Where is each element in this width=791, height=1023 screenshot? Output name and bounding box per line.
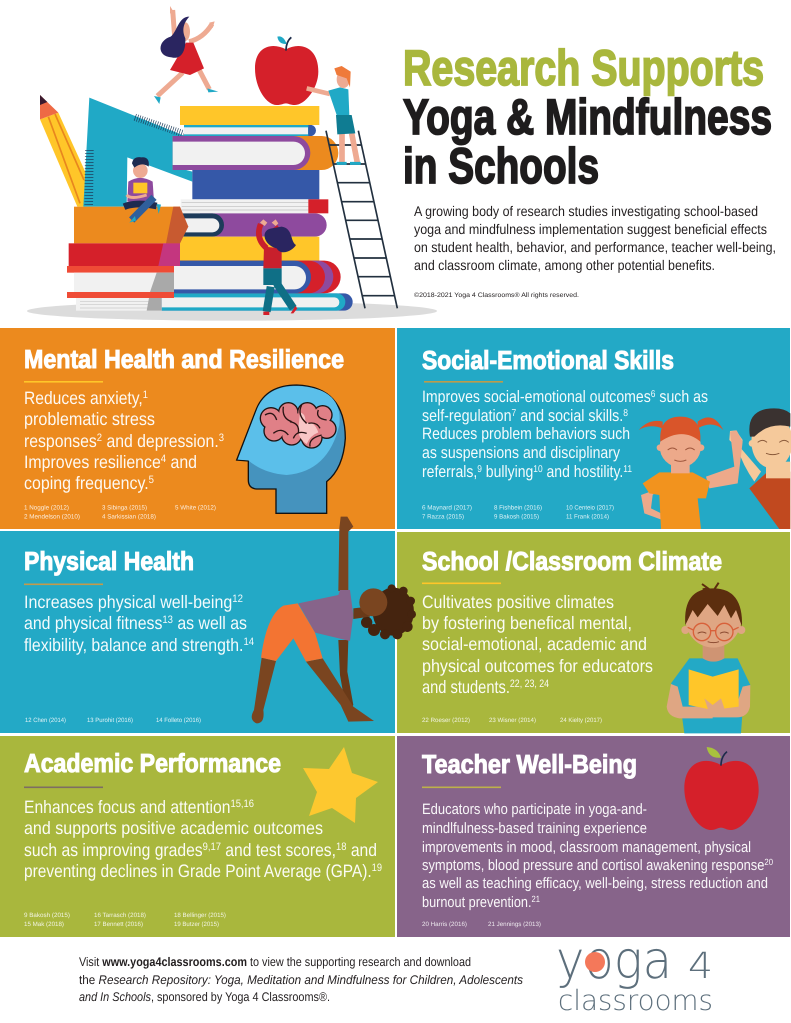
text: physical health body: [24, 592, 254, 655]
hero illustration: books, school supplies and children: [27, 6, 437, 321]
title: [403, 40, 772, 194]
footer text: [79, 955, 523, 1004]
intro paragraph: and classroom climate, among other potential benefits.: [414, 257, 715, 273]
text: social-emotional body: Reduces problem behaviors such: [422, 425, 630, 443]
logo: yoga 4 classrooms: yoga: [556, 931, 672, 991]
text: school climate body: physical outcomes for educators: [422, 656, 653, 676]
copyright: ©2018-2021 Yoga 4 Classrooms® All rights reserved.: [414, 292, 579, 299]
text: social-emotional body: 10: [533, 464, 543, 475]
illustration: boy with glasses reading: [667, 583, 750, 733]
text: mental health body: 1: [143, 389, 148, 401]
references: school climate: 22 Roeser (2012): [422, 717, 470, 724]
references: social-emotional: 9 Bakosh (2015): [494, 514, 539, 520]
text: teacher well-being body: burnout prevention.: [422, 894, 551, 911]
heading: physical health: Physical Health: [24, 546, 194, 576]
references: physical health: 13 Purohit (2016): [87, 717, 133, 724]
references: physical health: 12 Chen (2014): [25, 717, 66, 724]
text: mental health body: and depression.: [102, 431, 219, 451]
references: physical health: [25, 717, 201, 724]
text: mental health body: Reduces anxiety,: [24, 388, 161, 408]
logo: yoga 4 classrooms: [556, 931, 713, 1017]
text: social-emotional body: referrals,: [422, 463, 487, 481]
ground shadow: [27, 301, 437, 321]
text: social-emotional body: bullying: [482, 463, 533, 481]
references: academic performance: 15 Mak (2018): [24, 921, 64, 928]
heading: teacher well-being: Teacher Well-Being: [422, 749, 637, 779]
text: physical health body: and physical fitness: [24, 613, 181, 633]
text: physical health body: 14: [243, 636, 254, 648]
text: social-emotional body: 8: [623, 408, 628, 419]
ladder: [326, 131, 397, 308]
text: social-emotional body: 9: [477, 464, 482, 475]
text: mental health body: [24, 388, 224, 493]
text: physical health body: flexibility, balance and strength.: [24, 635, 274, 655]
references: social-emotional: 11 Frank (2014): [566, 514, 609, 520]
references: mental health: 3 Sibinga (2015): [102, 504, 147, 512]
text: school climate body: by fostering benefical mental,: [422, 613, 632, 633]
logo: yoga 4 classrooms: classrooms: [558, 984, 713, 1017]
text: academic performance body: 18: [336, 841, 346, 853]
text: academic performance body: 15,16: [230, 798, 254, 810]
references: social-emotional: 7 Razza (2015): [422, 514, 464, 520]
text: school climate body: 22, 23, 24: [510, 678, 549, 690]
references: academic performance: 17 Bennett (2016): [94, 921, 143, 928]
references: mental health: [24, 504, 216, 520]
heading: mental health: Mental Health and Resilience: [24, 344, 344, 374]
text: social-emotional body: 11: [623, 464, 632, 475]
text: social-emotional body: and social skills.: [516, 407, 623, 425]
child: girl reaching at bottom: [259, 219, 297, 315]
icon: apple on books: [255, 36, 318, 105]
references: academic performance: [24, 912, 226, 928]
icon: head with brain: [237, 385, 345, 513]
text: mental health body: 4: [161, 453, 166, 465]
text: social-emotional body: [422, 388, 708, 481]
text: social-emotional body: and hostility.: [543, 463, 623, 481]
text: teacher well-being body: 21: [532, 894, 540, 904]
panel: physical health: [0, 517, 416, 733]
text: school climate body: and students.: [422, 677, 530, 697]
panel: social-emotional skills: [397, 328, 791, 529]
text: academic performance body: Enhances focus and attention: [24, 797, 261, 817]
text: mental health body: problematic stress: [24, 409, 155, 429]
right stack of books: [162, 106, 353, 311]
text: academic performance body: [24, 797, 382, 881]
text: social-emotional body: Improves social-emotional outcomes: [422, 388, 690, 406]
references: school climate: [422, 717, 602, 724]
text: teacher well-being body: 20: [764, 857, 773, 867]
text: mental health body: coping frequency.: [24, 473, 165, 493]
text: mental health body: 5: [149, 474, 154, 486]
text: mental health body: and: [166, 452, 197, 472]
text: mental health body: 3: [219, 432, 224, 444]
text: teacher well-being body: [422, 801, 773, 911]
child: reading on orange book: [124, 157, 161, 223]
icon: star: [303, 747, 378, 823]
text: social-emotional body: self-regulation: [422, 407, 526, 425]
references: social-emotional: 8 Fishbein (2016): [494, 504, 542, 512]
text: social-emotional body: such as: [655, 388, 708, 406]
footer text: and In Schools, sponsored by Yoga 4 Classrooms®.: [79, 990, 330, 1004]
footer text: Visit www.yoga4classrooms.com to view the supporting research and download: [79, 955, 471, 969]
text: school climate body: [422, 592, 653, 697]
icon: pencil: [40, 95, 86, 207]
references: social-emotional: [422, 504, 614, 520]
text: teacher well-being body: Educators who participate in yoga-and-: [422, 801, 647, 818]
text: school climate body: social-emotional, academic and: [422, 634, 647, 654]
heading: academic performance: Academic Performance: [24, 748, 281, 778]
references: teacher well-being: 20 Harris (2016): [422, 921, 467, 928]
panel: teacher well-being: [397, 736, 790, 937]
references: school climate: 24 Kielty (2017): [560, 717, 602, 724]
text: physical health body: 12: [232, 593, 243, 605]
illustration: child in triangle yoga pose: [252, 517, 416, 723]
intro paragraph: [414, 203, 776, 273]
illustration: children high five: [639, 408, 791, 529]
references: physical health: 14 Folleto (2016): [156, 717, 201, 724]
text: physical health body: Increases physical well-being: [24, 592, 258, 612]
references: school climate: 23 Wisner (2014): [489, 717, 536, 724]
text: physical health body: as well as: [173, 613, 247, 633]
text: academic performance body: such as improving grades: [24, 840, 229, 860]
references: academic performance: 16 Tarrasch (2018): [94, 912, 146, 919]
text: mental health body: Improves resilience: [24, 452, 179, 472]
references: academic performance: 19 Butzer (2015): [174, 921, 219, 928]
heading: social-emotional: Social-Emotional Skills: [422, 345, 674, 375]
text: mental health body: responses: [24, 431, 107, 451]
child: girl dancing on top: [154, 6, 218, 104]
text: school climate body: Cultivates positive climates: [422, 592, 614, 612]
intro paragraph: A growing body of research studies investigating school-based: [414, 203, 758, 219]
references: social-emotional: 10 Centeio (2017): [566, 504, 614, 512]
footer text: the Research Repository: Yoga, Meditation and Mindfulness for Children, Adolescents: [79, 973, 523, 987]
text: physical health body: 13: [162, 614, 173, 626]
text: social-emotional body: 7: [512, 408, 516, 419]
references: mental health: 1 Noggle (2012): [24, 504, 69, 512]
heading: school climate: School /Classroom Climate: [422, 546, 722, 576]
title: in Schools: [403, 138, 599, 194]
references: teacher well-being: [422, 921, 541, 928]
references: mental health: 4 Sarkissian (2018): [102, 514, 156, 520]
text: social-emotional body: as suspensions and disciplinary: [422, 444, 621, 462]
references: academic performance: 18 Bellinger (2015): [174, 912, 226, 919]
text: academic performance body: 19: [372, 862, 382, 874]
references: teacher well-being: 21 Jennings (2013): [488, 921, 541, 928]
text: social-emotional body: 6: [651, 389, 656, 400]
icon: set square ruler: [83, 98, 192, 207]
text: teacher well-being body: mindlfulness-based training experience: [422, 820, 647, 837]
text: academic performance body: and: [346, 840, 377, 860]
child: boy on ladder: [307, 66, 361, 163]
references: academic performance: 9 Bakosh (2015): [24, 912, 70, 919]
text: academic performance body: preventing declines in Grade Point Average (GPA).: [24, 861, 429, 881]
panel: school / classroom climate: [397, 532, 790, 733]
text: academic performance body: and test scores,: [221, 840, 336, 860]
left stack of books: [67, 207, 188, 311]
references: social-emotional: 6 Maynard (2017): [422, 504, 472, 512]
panel: academic performance: [0, 736, 395, 937]
text: academic performance body: and supports positive academic outcomes: [24, 818, 323, 838]
text: academic performance body: 9,17: [203, 841, 221, 853]
references: mental health: 5 White (2012): [175, 504, 216, 512]
text: mental health body: 2: [97, 432, 102, 444]
icon: red apple: [684, 747, 759, 830]
references: mental health: 2 Mendelson (2010): [24, 514, 80, 520]
logo: yoga 4 classrooms: 4: [688, 946, 713, 987]
panel: mental health and resilience: [0, 328, 395, 529]
